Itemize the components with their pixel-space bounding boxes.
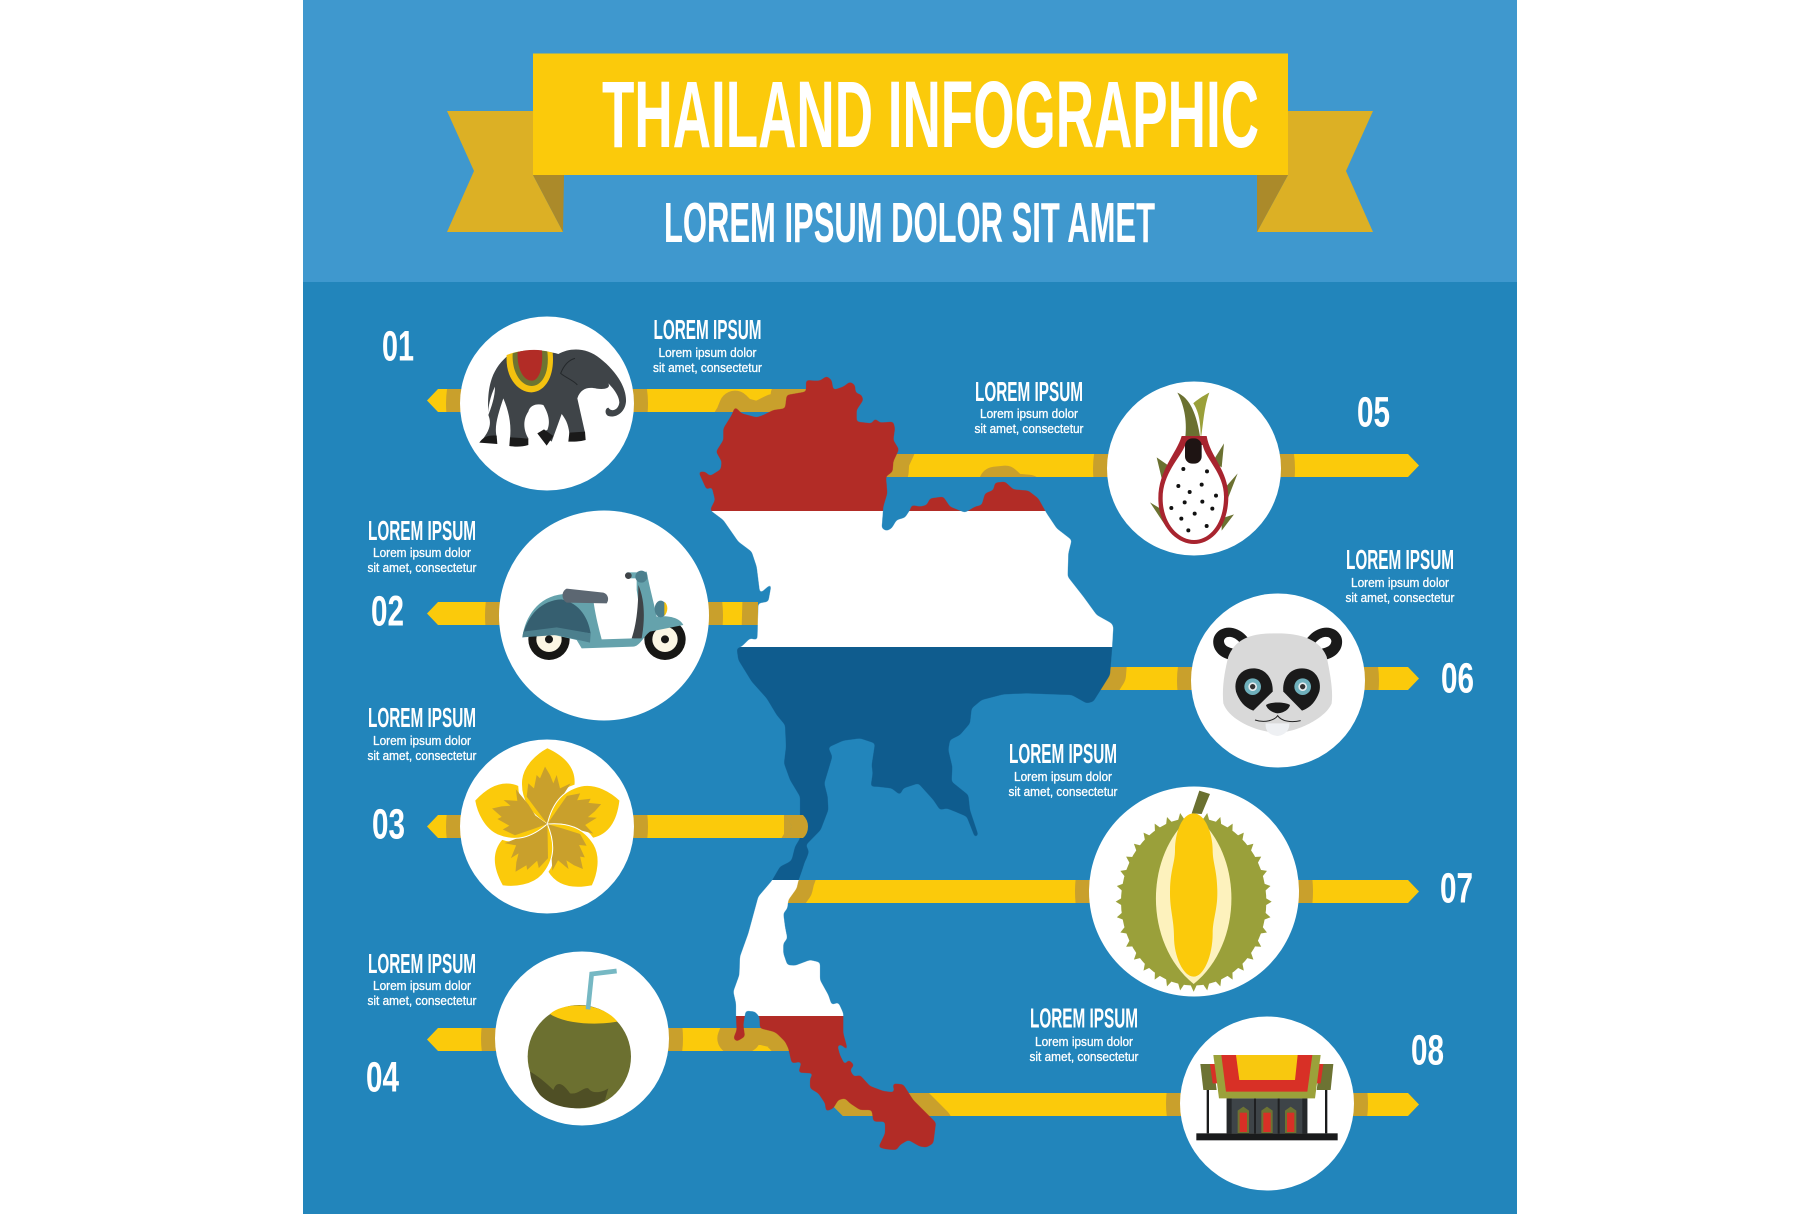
text block 02: sit amet, consectetur xyxy=(368,560,477,575)
number 02: 02 xyxy=(371,588,404,636)
text block 04 xyxy=(368,948,477,1008)
text block 06: LOREM IPSUM xyxy=(1346,544,1454,575)
text block 05: sit amet, consectetur xyxy=(974,421,1084,436)
icon: durian xyxy=(1116,791,1272,992)
icon: temple xyxy=(1196,1055,1338,1140)
icon: panda xyxy=(1213,628,1342,736)
text block 01 xyxy=(653,314,763,375)
text block 08: LOREM IPSUM xyxy=(1030,1002,1138,1034)
ribbon banner xyxy=(447,54,1373,232)
text block 05: Lorem ipsum dolor xyxy=(980,406,1079,421)
item 01: elephant xyxy=(460,316,634,490)
arrow 03 rounded end xyxy=(785,815,808,838)
text block 03 xyxy=(368,702,477,763)
number 04: 04 xyxy=(366,1054,399,1102)
text block 02 xyxy=(368,515,477,575)
icon: scooter xyxy=(522,571,686,660)
title: THAILAND INFOGRAPHIC xyxy=(602,62,1259,168)
item 08: temple xyxy=(1180,1016,1354,1190)
item 05: dragon fruit xyxy=(1107,382,1281,556)
text block 07: LOREM IPSUM xyxy=(1009,738,1117,769)
infographic xyxy=(303,0,1517,1214)
number 06: 06 xyxy=(1441,654,1474,702)
text block 01: LOREM IPSUM xyxy=(654,314,762,345)
text block 07 xyxy=(1008,738,1118,799)
text block 02: LOREM IPSUM xyxy=(368,515,476,546)
icon: dragon fruit xyxy=(1150,393,1238,544)
text block 03: Lorem ipsum dolor xyxy=(373,733,472,748)
number 07: 07 xyxy=(1440,864,1473,912)
text block 06 xyxy=(1346,544,1455,605)
icon: frangipani flower xyxy=(467,748,629,902)
text block 01: sit amet, consectetur xyxy=(653,360,763,375)
subtitle: LOREM IPSUM DOLOR SIT AMET xyxy=(664,191,1155,254)
panel: header background xyxy=(303,0,1517,282)
text block 03: LOREM IPSUM xyxy=(368,702,476,733)
text block 06: Lorem ipsum dolor xyxy=(1351,575,1450,590)
text block 03: sit amet, consectetur xyxy=(368,748,477,763)
text block 05 xyxy=(974,376,1084,436)
number 03: 03 xyxy=(372,800,405,848)
arrows xyxy=(427,389,1419,1116)
text block 06: sit amet, consectetur xyxy=(1346,590,1455,605)
text block 08: sit amet, consectetur xyxy=(1030,1049,1139,1064)
text block 04: Lorem ipsum dolor xyxy=(373,978,472,993)
text block 08 xyxy=(1030,1002,1139,1064)
text block 01: Lorem ipsum dolor xyxy=(658,345,757,360)
item 04: coconut xyxy=(495,952,669,1126)
panel: lower background xyxy=(303,282,1517,1214)
text block 08: Lorem ipsum dolor xyxy=(1035,1034,1134,1049)
text block 04: LOREM IPSUM xyxy=(368,948,476,979)
text block 05: LOREM IPSUM xyxy=(975,376,1083,407)
map of Thailand with flag stripes xyxy=(700,376,1114,1150)
text block 04: sit amet, consectetur xyxy=(368,993,477,1008)
text block 07: Lorem ipsum dolor xyxy=(1014,769,1113,784)
item 02: scooter xyxy=(499,510,709,720)
number 05: 05 xyxy=(1357,388,1390,436)
text block 02: Lorem ipsum dolor xyxy=(373,545,472,560)
number 01: 01 xyxy=(382,322,414,370)
item 03: flower xyxy=(460,740,634,914)
icon: elephant xyxy=(479,349,626,447)
icon: coconut xyxy=(528,971,631,1108)
number 08: 08 xyxy=(1411,1026,1444,1074)
arrow shadows from map and circles xyxy=(446,389,1379,1116)
item 06: panda xyxy=(1191,594,1365,768)
item 07: durian xyxy=(1089,786,1299,996)
text block 07: sit amet, consectetur xyxy=(1008,784,1118,799)
